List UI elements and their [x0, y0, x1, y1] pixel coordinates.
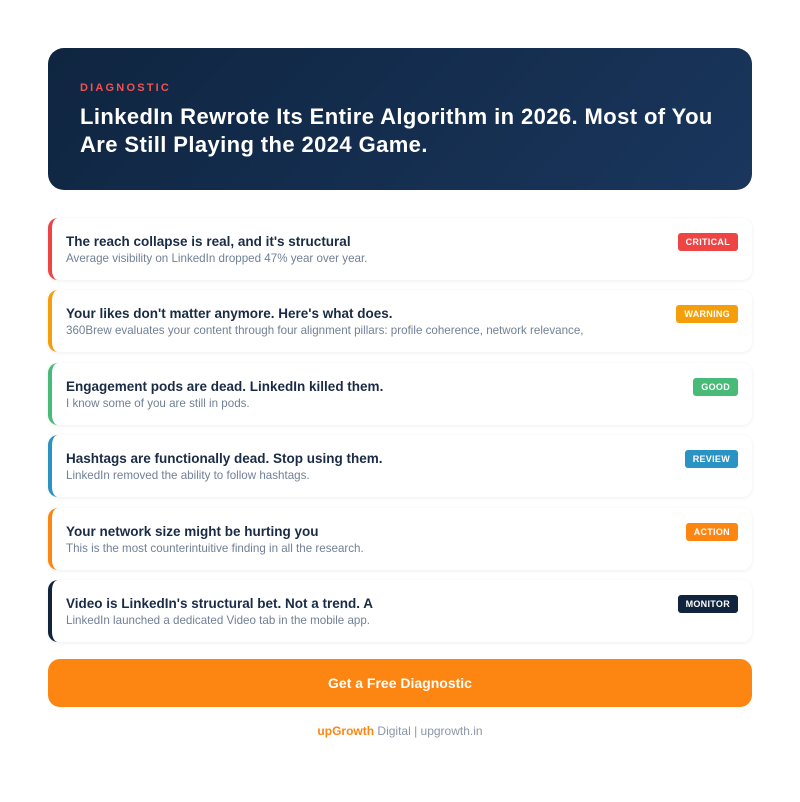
card: video: LinkedIn launched a dedicated Video tab in the mobile app. [66, 614, 370, 627]
card: network size: ACTION [694, 527, 730, 537]
card: video: MONITOR [686, 599, 730, 609]
card: hashtags [48, 435, 752, 497]
card: likes: 360Brew evaluates your content through four alignment pillars: profile coherence, network relevance, [66, 324, 584, 337]
footer: upGrowth Digital | upgrowth.in [317, 724, 483, 738]
card: network size: This is the most counterintuitive finding in all the research. [66, 542, 364, 555]
card: hashtags: REVIEW [693, 454, 730, 464]
card: network size: Your network size might be hurting you [66, 524, 319, 539]
card: network size [48, 508, 752, 570]
card: pods [48, 363, 752, 425]
card: likes: Your likes don't matter anymore. Here's what does. [66, 306, 393, 321]
card: video: Video is LinkedIn's structural bet. Not a trend. A [66, 596, 373, 611]
card: pods: GOOD [701, 382, 730, 392]
card: reach collapse: CRITICAL [686, 237, 730, 247]
header panel [48, 48, 752, 190]
kicker: DIAGNOSTIC [80, 82, 171, 94]
card: likes: WARNING [684, 309, 730, 319]
card: pods: Engagement pods are dead. LinkedIn killed them. [66, 379, 383, 394]
CTA button [48, 659, 752, 707]
card: pods: I know some of you are still in pods. [66, 397, 250, 410]
card: video [48, 580, 752, 642]
card: hashtags: LinkedIn removed the ability to follow hashtags. [66, 469, 310, 482]
card: reach collapse [48, 218, 752, 280]
title: LinkedIn Rewrote Its Entire Algorithm in 2026. Most of You Are Still Playing the 2024 Game. [80, 104, 713, 157]
card: reach collapse: The reach collapse is real, and it's structural [66, 234, 351, 249]
card: likes [48, 290, 752, 352]
card: reach collapse: Average visibility on LinkedIn dropped 47% year over year. [66, 252, 367, 265]
CTA button: Get a Free Diagnostic [328, 675, 472, 691]
card: hashtags: Hashtags are functionally dead. Stop using them. [66, 451, 383, 466]
